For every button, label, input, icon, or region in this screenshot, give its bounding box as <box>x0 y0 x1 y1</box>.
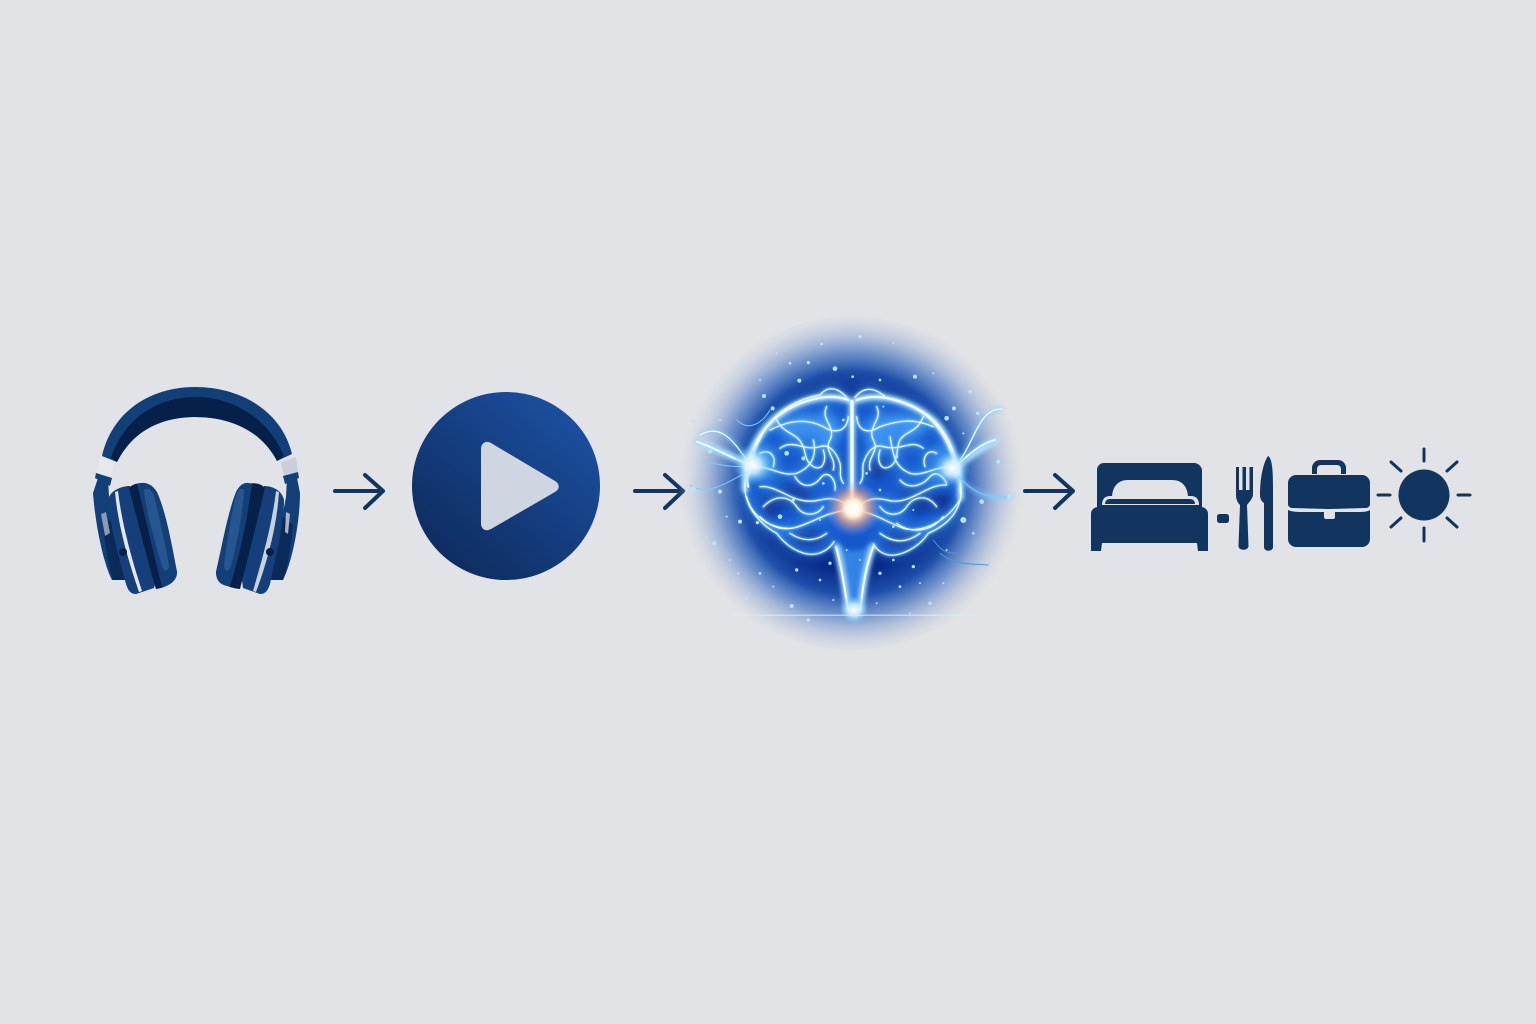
icon: sun <box>1378 449 1470 541</box>
brain body <box>745 397 961 610</box>
icon: bed <box>1091 463 1208 551</box>
icon: fork and knife <box>1236 456 1273 551</box>
light burst points <box>730 444 977 625</box>
arrow 1 <box>335 475 383 508</box>
icon: briefcase <box>1288 460 1370 547</box>
arrow 2 <box>635 475 683 508</box>
particles <box>690 335 1011 622</box>
arrow 3 <box>1025 475 1073 508</box>
left ear cup <box>108 483 177 594</box>
neural outline glow <box>700 389 997 610</box>
icon: headphones <box>93 387 300 594</box>
right ear cup <box>216 483 284 594</box>
icon: glowing brain <box>677 317 1027 650</box>
side flares <box>690 409 1010 565</box>
neural outlines <box>745 389 961 610</box>
dash connector <box>1217 514 1229 523</box>
icon: play button <box>412 392 600 580</box>
